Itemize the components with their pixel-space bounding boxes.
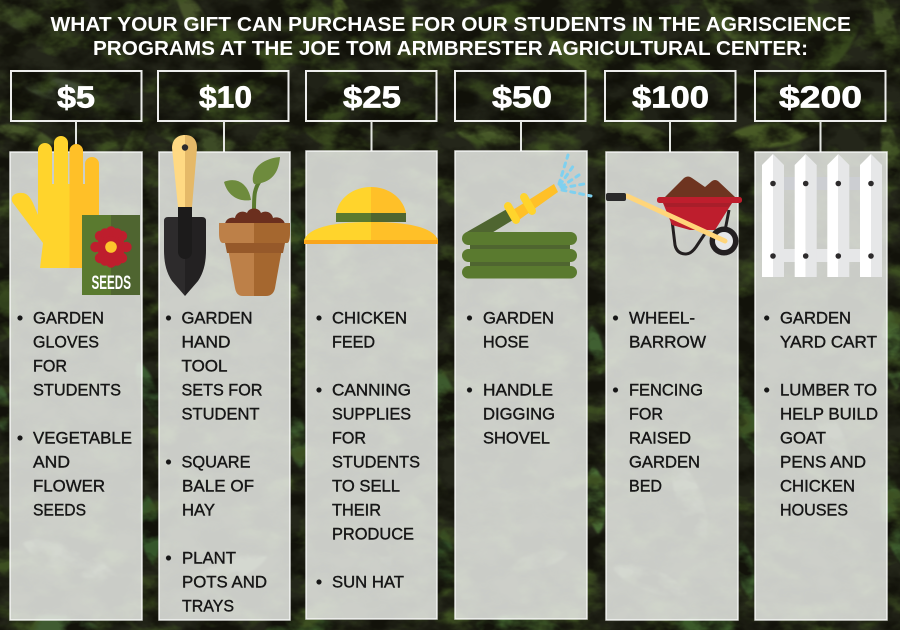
list: $100 items: WHEEL- [629,308,695,328]
list: $10 items: TRAYS [182,596,234,616]
list: $10 items: PLANT [182,548,236,568]
icon: glove and seed packet [12,136,140,295]
list: $5 items: GARDEN [33,308,104,328]
list: $10 items: POTS AND [182,572,267,592]
list: $200 items: PENS AND [780,452,866,472]
list: $5 items: FOR [33,356,67,376]
list: $25 items: TO SELL [332,476,400,496]
panel: $5 column [10,71,142,620]
icon: garden hose [462,155,591,278]
title [50,14,851,60]
list: $10 items: HAND [182,332,230,352]
list: $100 items: RAISED [629,428,691,448]
icon: wheelbarrow [606,176,742,256]
list: $200 items: HELP BUILD [780,404,878,424]
list: $10 items: GARDEN [182,308,252,328]
list: $10 items: TOOL [182,356,228,376]
list: $100 items: GARDEN [629,452,700,472]
panel: $100 column [605,71,742,620]
list: $200 items: HOUSES [780,500,848,520]
list: $100 items: BED [629,476,662,496]
list: $5 items: VEGETABLE [33,428,132,448]
list: $200 items [764,308,878,520]
price: $50: $50 [492,80,552,114]
list: $25 items: SUN HAT [332,572,404,592]
panel: $200 column [755,71,887,620]
icon: sun hat [304,187,438,244]
list: $5 items: FLOWER [33,476,105,496]
list: $25 items: STUDENTS [332,452,420,472]
list: $25 items: FOR [332,428,366,448]
list: $100 items [613,308,706,496]
list: $50 items: HANDLE [483,380,553,400]
list: $10 items: SETS FOR [182,380,262,400]
list: $5 items: AND [33,452,70,472]
list: $25 items: SUPPLIES [332,404,411,424]
icon: picket fence [762,154,882,277]
list: $10 items: STUDENT [182,404,260,424]
list: $50 items: GARDEN [483,308,554,328]
list: $5 items: GLOVES [33,332,99,352]
list: $5 items [18,308,132,520]
panel: $50 column [455,71,591,619]
list: $25 items: CHICKEN [332,308,407,328]
list: $200 items: LUMBER TO [780,380,877,400]
list: $5 items: SEEDS [33,500,86,520]
list: $200 items: YARD CART [780,332,877,352]
panel: $10 column [158,71,290,620]
icon: trowel [164,135,206,296]
list: $10 items [166,308,267,616]
list: $25 items [317,308,420,592]
price: $25: $25 [343,80,401,114]
price: $10: $10 [199,80,252,114]
list: $200 items: GARDEN [780,308,851,328]
list: $50 items: HOSE [483,332,529,352]
list: $50 items: DIGGING [483,404,555,424]
icon: seedling in pot [219,157,290,296]
price: $100: $100 [632,80,709,114]
icon: glove and seed packet: SEEDS [92,273,131,294]
title: PROGRAMS AT THE JOE TOM ARMBRESTER AGRICULTURAL CENTER: [93,38,808,60]
list: $100 items: FENCING [629,380,703,400]
list: $25 items: FEED [332,332,375,352]
list: $200 items: CHICKEN [780,476,855,496]
list: $10 items: BALE OF [182,476,254,496]
title: WHAT YOUR GIFT CAN PURCHASE FOR OUR STUDENTS IN THE AGRISCIENCE [50,14,851,36]
list: $5 items: STUDENTS [33,380,121,400]
list: $25 items: CANNING [332,380,411,400]
list: $10 items: HAY [182,500,215,520]
list: $100 items: FOR [629,404,663,424]
list: $50 items: SHOVEL [483,428,550,448]
list: $200 items: GOAT [780,428,826,448]
list: $10 items: SQUARE [182,452,250,472]
price: $200: $200 [779,80,862,114]
price: $5: $5 [57,80,95,114]
panel: $25 column [304,71,438,619]
list: $25 items: PRODUCE [332,524,414,544]
list: $25 items: THEIR [332,500,381,520]
list: $100 items: BARROW [629,332,706,352]
list: $50 items [467,308,555,448]
